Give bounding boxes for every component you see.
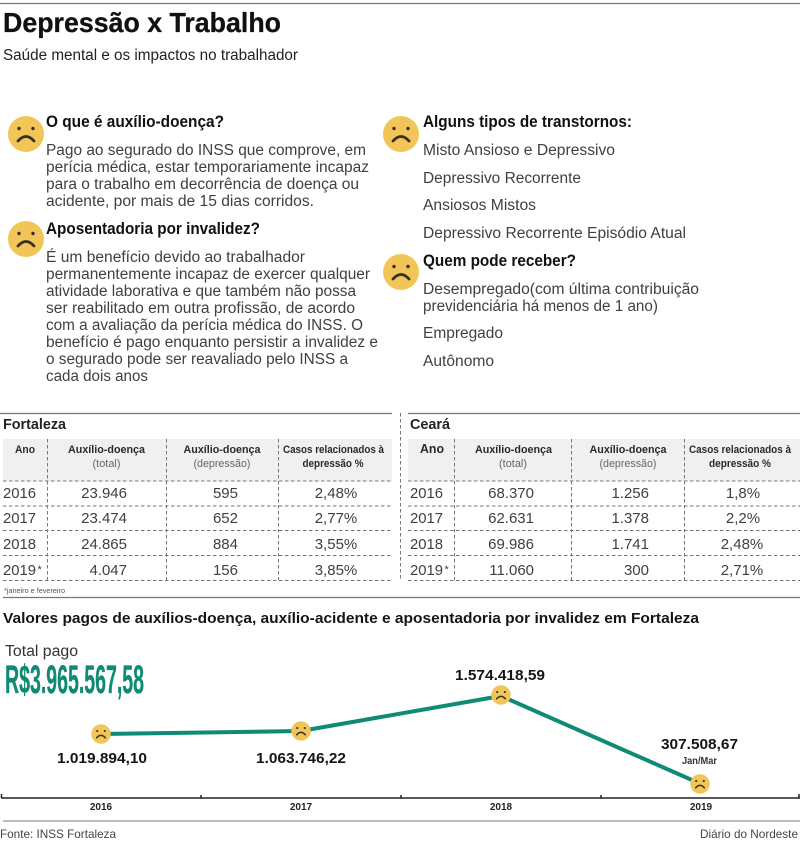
row 2017: 2,77%: [315, 510, 357, 527]
row 2018: 884: [213, 536, 238, 553]
point 2016: [57, 724, 147, 767]
table column headers: [420, 441, 792, 470]
icon: sad face: [8, 116, 44, 152]
row 2016: 2016: [410, 485, 443, 502]
row 2019: *: [38, 564, 42, 576]
row 2019: 300: [624, 562, 649, 579]
table header background: [408, 439, 800, 481]
table column headers: Casos relacionados à: [283, 444, 385, 456]
x axis labels: 2019: [690, 802, 713, 813]
list: Empregado: [423, 325, 503, 342]
panel: quem pode receber: [383, 252, 699, 370]
text block: atividade laborativa e que também não possa: [46, 283, 356, 300]
table column headers: Auxílio-doença: [475, 444, 553, 456]
footnote: *janeiro e fevereiro: [4, 586, 65, 595]
text block: É um benefício devido ao trabalhador: [46, 249, 305, 266]
row 2016: [410, 485, 760, 502]
chart heading: Valores pagos de auxílios-doença, auxílio-acidente e aposentadoria por invalidez em Fortaleza: [3, 610, 700, 627]
table header background: [3, 439, 392, 481]
table column headers: Auxílio-doença: [184, 444, 261, 456]
point 2017: 1.063.746,22: [256, 750, 346, 767]
line chart: [1, 667, 800, 813]
table column headers: Auxílio-doença: [68, 444, 146, 456]
row 2017: 2017: [3, 510, 36, 527]
row 2016: 595: [213, 485, 238, 502]
table column headers: (depressão): [600, 458, 656, 470]
row 2019: 4.047: [89, 562, 127, 579]
text block: benefício é pago enquanto persistir a invalidez e: [46, 334, 378, 351]
list: Depressivo Recorrente Episódio Atual: [423, 225, 686, 242]
row 2019: [3, 562, 357, 579]
table column headers: (total): [499, 458, 527, 470]
row 2017: 2017: [410, 510, 443, 527]
table column headers: (total): [92, 458, 120, 470]
row 2016: 1,8%: [726, 485, 760, 502]
list: Misto Ansioso e Depressivo: [423, 142, 615, 159]
row 2018: 24.865: [81, 536, 127, 553]
row 2018: 69.986: [488, 536, 534, 553]
row 2018: [410, 536, 763, 553]
row 2016: 68.370: [488, 485, 534, 502]
icon: sad face: [8, 221, 44, 257]
row 2016: 2,48%: [315, 485, 357, 502]
row 2016: 2016: [3, 485, 36, 502]
text block: acidente, por mais de 15 dias corridos.: [46, 193, 314, 210]
title: Depressão x Trabalho: [3, 7, 281, 38]
point 2017: [256, 721, 346, 767]
x axis labels: [90, 802, 713, 813]
row 2017: 652: [213, 510, 238, 527]
callout: total pago: [5, 643, 144, 702]
row 2017: [410, 510, 760, 527]
heading: O que é auxílio-doença?: [46, 113, 224, 131]
table column headers: Ano: [420, 441, 444, 456]
row 2019: 156: [213, 562, 238, 579]
x axis: [1, 794, 800, 798]
list: Autônomo: [423, 353, 494, 370]
row 2018: 2,48%: [721, 536, 763, 553]
list: previdenciária há menos de 1 ano): [423, 298, 658, 315]
list: [423, 142, 686, 242]
row 2017: 62.631: [488, 510, 534, 527]
point 2018: 1.574.418,59: [455, 667, 545, 684]
source: Fonte: INSS Fortaleza: [0, 827, 116, 841]
row 2018: 2018: [3, 536, 36, 553]
row 2017: [3, 510, 357, 527]
heading: Alguns tipos de transtornos:: [423, 113, 632, 131]
row 2019: [410, 562, 763, 579]
row 2019: 3,85%: [315, 562, 357, 579]
table heading: Fortaleza: [3, 417, 67, 433]
row 2017: 2,2%: [726, 510, 760, 527]
text block: ser reabilitado em outra profissão, de acordo: [46, 300, 355, 317]
row 2016: 1.256: [611, 485, 649, 502]
table column headers: depressão %: [709, 458, 771, 470]
row 2018: 3,55%: [315, 536, 357, 553]
panel: alguns tipos de transtornos: [383, 113, 686, 242]
row 2018: [3, 536, 357, 553]
icon: sad face: [383, 116, 419, 152]
text block: Pago ao segurado do INSS que comprove, em: [46, 142, 366, 159]
x axis labels: 2018: [490, 802, 513, 813]
point 2019: Jan/Mar: [682, 756, 717, 767]
row 2017: 23.474: [81, 510, 127, 527]
table column headers: Casos relacionados à: [689, 444, 792, 456]
table heading: Ceará: [410, 417, 451, 433]
table column headers: depressão %: [302, 458, 364, 470]
line series: [101, 696, 701, 784]
icon: sad face: [383, 254, 419, 290]
row 2019: 2,71%: [721, 562, 763, 579]
table: Fortaleza: [3, 417, 392, 595]
point 2016: 1.019.894,10: [57, 750, 147, 767]
heading: Quem pode receber?: [423, 252, 576, 270]
text block: o segurado pode ser reavaliado pelo INSS a: [46, 351, 348, 368]
row 2018: 2018: [410, 536, 443, 553]
table column headers: Auxílio-doença: [590, 444, 667, 456]
subtitle: Saúde mental e os impactos no trabalhador: [3, 47, 298, 64]
list: Ansiosos Mistos: [423, 197, 536, 214]
row 2016: 23.946: [81, 485, 127, 502]
text block: cada dois anos: [46, 368, 148, 385]
text block: permanentemente incapaz de exercer qualquer: [46, 266, 370, 283]
point 2019: 307.508,67: [661, 736, 738, 753]
text block: para o trabalho em decorrência de doença ou: [46, 176, 359, 193]
table column headers: (depressão): [194, 458, 250, 470]
row 2017: 1.378: [611, 510, 649, 527]
callout label: Total pago: [5, 643, 78, 660]
list: [423, 281, 699, 370]
table column headers: Ano: [15, 444, 35, 456]
table: Ceará: [408, 417, 800, 580]
row 2018: 1.741: [611, 536, 649, 553]
row 2019: 11.060: [489, 562, 534, 579]
row 2016: [3, 485, 357, 502]
heading: Aposentadoria por invalidez?: [46, 220, 260, 238]
text block: [46, 142, 369, 210]
point 2018: [455, 667, 545, 705]
panel: o que é auxílio-doença: [8, 113, 369, 210]
text block: [46, 249, 378, 385]
text: R$3.965.567,58: [5, 658, 144, 702]
point 2019: [661, 736, 738, 794]
row 2019: 2019: [3, 562, 36, 579]
text block: perícia médica, estar temporariamente incapaz: [46, 159, 369, 176]
credit: Diário do Nordeste: [700, 827, 798, 841]
list: Desempregado(com última contribuição: [423, 281, 699, 298]
panel: aposentadoria por invalidez: [8, 220, 378, 385]
list: Depressivo Recorrente: [423, 170, 581, 187]
row 2019: 2019: [410, 562, 443, 579]
table column headers: [15, 444, 385, 470]
text block: com a avaliação da perícia médica do INSS. O: [46, 317, 363, 334]
row 2019: *: [444, 564, 450, 576]
x axis labels: 2017: [290, 802, 313, 813]
x axis labels: 2016: [90, 802, 113, 813]
